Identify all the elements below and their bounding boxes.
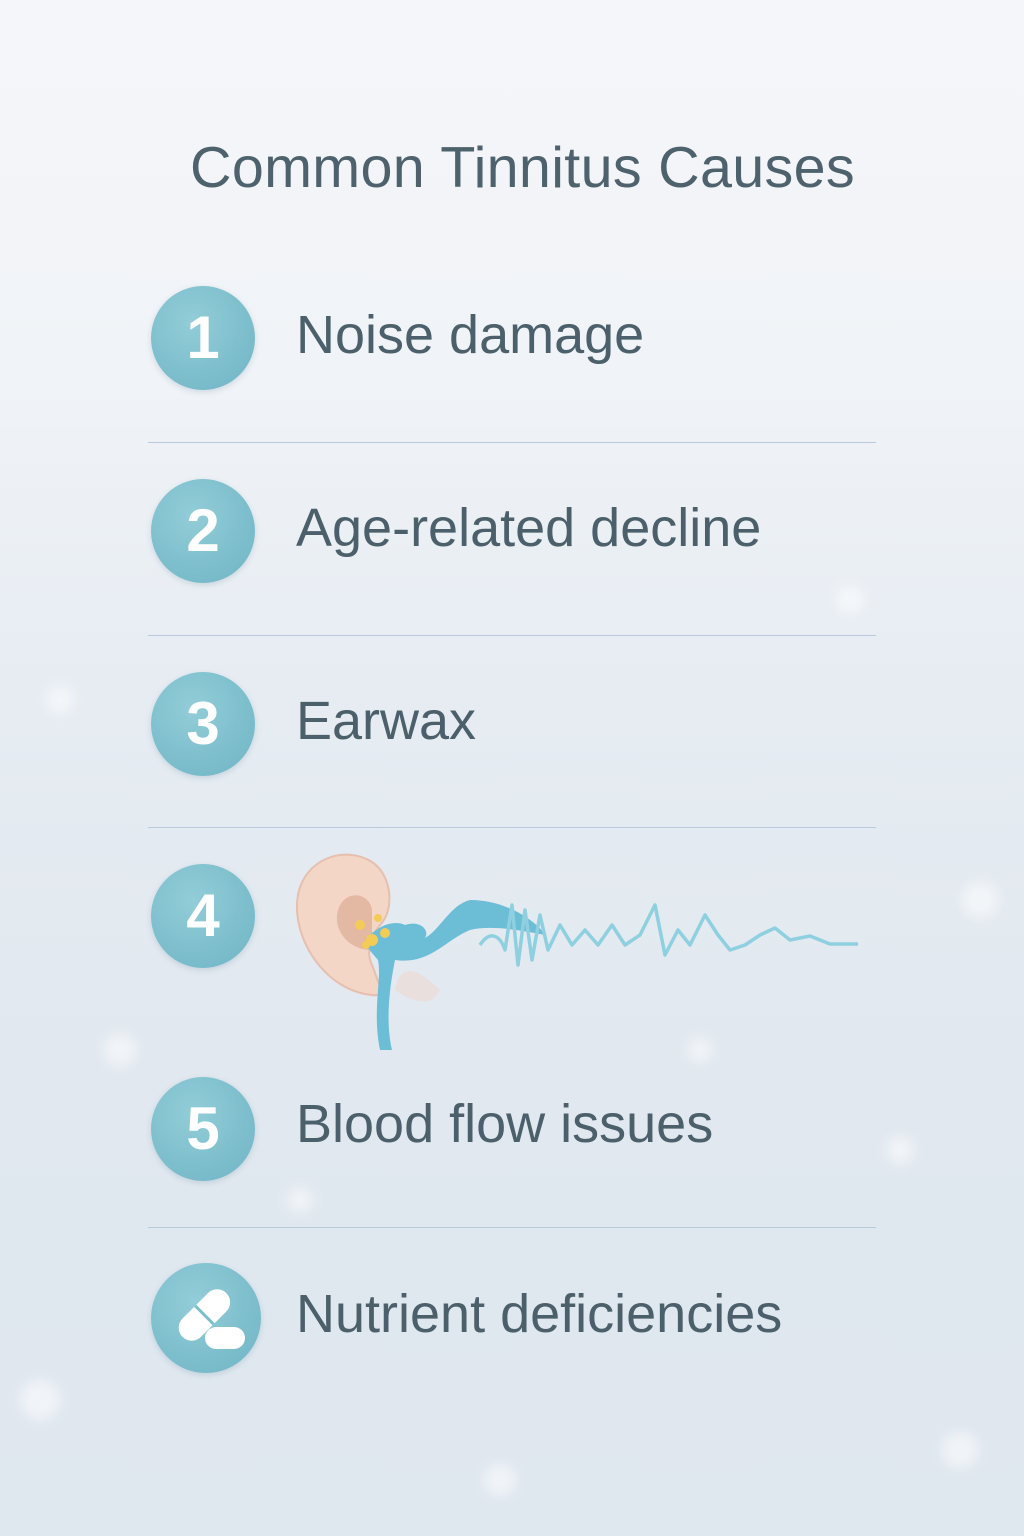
badge 3: 3 <box>186 690 220 757</box>
badge 4: 4 <box>186 882 220 949</box>
badge: pill icon <box>151 1263 261 1373</box>
illustration: ear with sound wave <box>296 854 858 1050</box>
item 3 <box>149 672 476 780</box>
item 1 <box>149 286 644 394</box>
badge 5: 5 <box>186 1095 220 1162</box>
label 2: Age-related decline <box>296 498 761 558</box>
item 4 <box>149 854 858 1050</box>
label 3: Earwax <box>296 691 476 751</box>
title: Common Tinnitus Causes <box>190 136 855 200</box>
label 5: Blood flow issues <box>296 1094 713 1154</box>
badge 1 <box>151 286 255 390</box>
item 2 <box>149 479 761 587</box>
label 1: Noise damage <box>296 305 644 365</box>
item 6 <box>149 1263 782 1377</box>
badge 3 <box>151 672 255 776</box>
badge 4 <box>151 864 255 968</box>
badge 5 <box>151 1077 255 1181</box>
item 5 <box>149 1077 713 1185</box>
badge 1: 1 <box>186 304 220 371</box>
label 6: Nutrient deficiencies <box>296 1284 782 1344</box>
badge 2 <box>151 479 255 583</box>
badge 2: 2 <box>186 497 220 564</box>
